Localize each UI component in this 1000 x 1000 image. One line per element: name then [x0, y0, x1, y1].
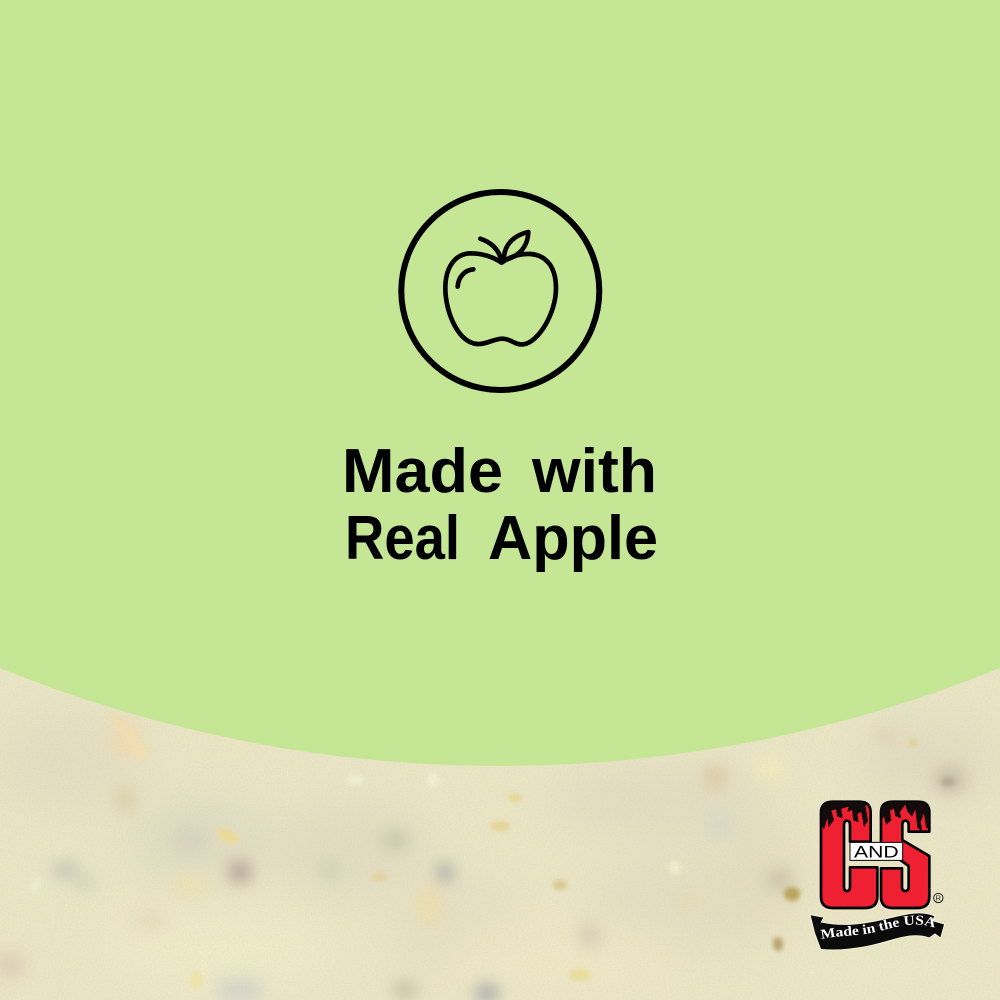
ribbon: Made in the USA	[810, 912, 946, 950]
icon: apple in circle	[401, 192, 599, 390]
ribbon: Made in the USA: Made in the USA	[820, 916, 935, 939]
logo letters	[821, 802, 929, 908]
green curved panel	[0, 0, 1000, 766]
registered mark: R	[936, 894, 941, 903]
heading: Made with Real Apple	[342, 437, 658, 573]
registered mark	[934, 893, 943, 903]
heading: Made with Real Apple: Apple	[488, 504, 658, 573]
heading: Made with Real Apple: Real	[345, 504, 460, 573]
logo letters: AND	[854, 843, 899, 862]
heading: Made with Real Apple: Made	[342, 437, 503, 506]
heading: Made with Real Apple: with	[531, 437, 657, 506]
logo: C and S Made in the USA	[810, 800, 946, 950]
